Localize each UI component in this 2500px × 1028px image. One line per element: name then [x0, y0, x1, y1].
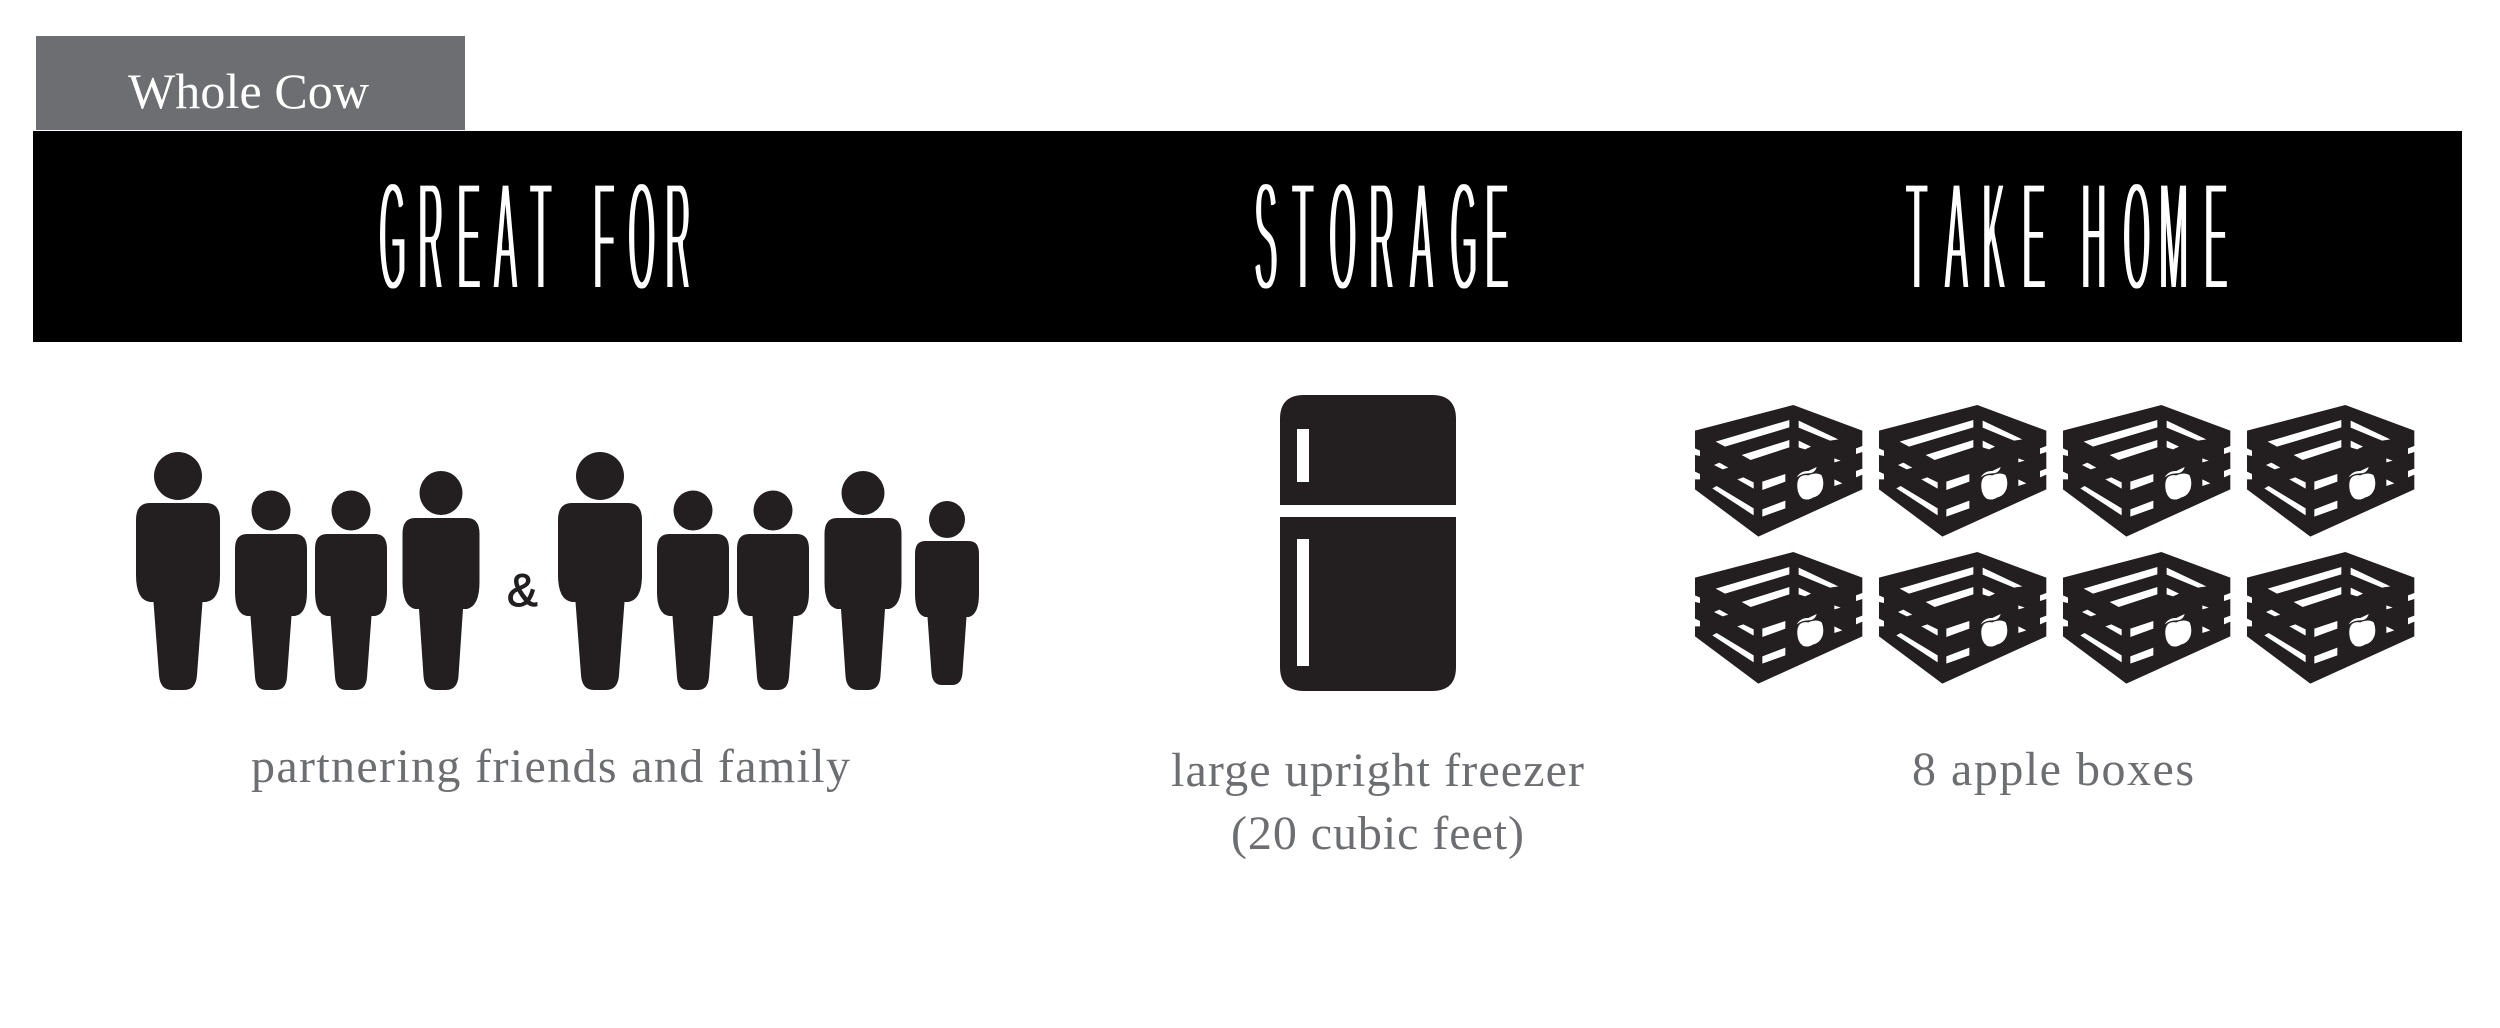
icon: apple box 8 — [2247, 552, 2414, 684]
icon: person 8 — [824, 471, 902, 690]
heading: storage: STORAGE — [1254, 149, 1508, 323]
icon: person 9 — [915, 501, 979, 685]
icon: person 4 — [402, 471, 480, 690]
icon: apple box 1 — [1695, 405, 1862, 537]
caption: freezer — [1171, 744, 1584, 860]
icon: person 5 — [558, 452, 642, 690]
icon: apple box 7 — [2063, 552, 2230, 684]
ampersand: & — [507, 564, 538, 616]
apple box icons — [1695, 405, 2414, 684]
icon: person 1 — [136, 452, 220, 690]
icon: apple box 5 — [1695, 552, 1862, 684]
header bar — [33, 131, 2462, 342]
heading: take home: TAKE HOME — [1906, 149, 2227, 323]
icon: upright freezer — [1280, 395, 1456, 691]
caption: partnering friends and family: partnering friends and family — [251, 740, 850, 793]
caption: 8 apple boxes: 8 apple boxes — [1912, 743, 2194, 796]
icon: person 2 — [235, 490, 307, 690]
column headings — [379, 149, 2227, 323]
caption: freezer: large upright freezer — [1171, 744, 1584, 797]
tab: Whole Cow — [36, 36, 465, 130]
people group icons — [136, 452, 979, 690]
icon: apple box 4 — [2247, 405, 2414, 537]
tab: Whole Cow: Whole Cow — [128, 63, 369, 119]
icon: person 3 — [315, 490, 387, 690]
heading: great for: GREAT FOR — [379, 149, 690, 323]
caption: freezer: (20 cubic feet) — [1231, 807, 1524, 860]
icon: person 7 — [737, 490, 809, 690]
icon: apple box 2 — [1879, 405, 2046, 537]
icon: apple box 3 — [2063, 405, 2230, 537]
icon: apple box 6 — [1879, 552, 2046, 684]
icon: person 6 — [657, 490, 729, 690]
